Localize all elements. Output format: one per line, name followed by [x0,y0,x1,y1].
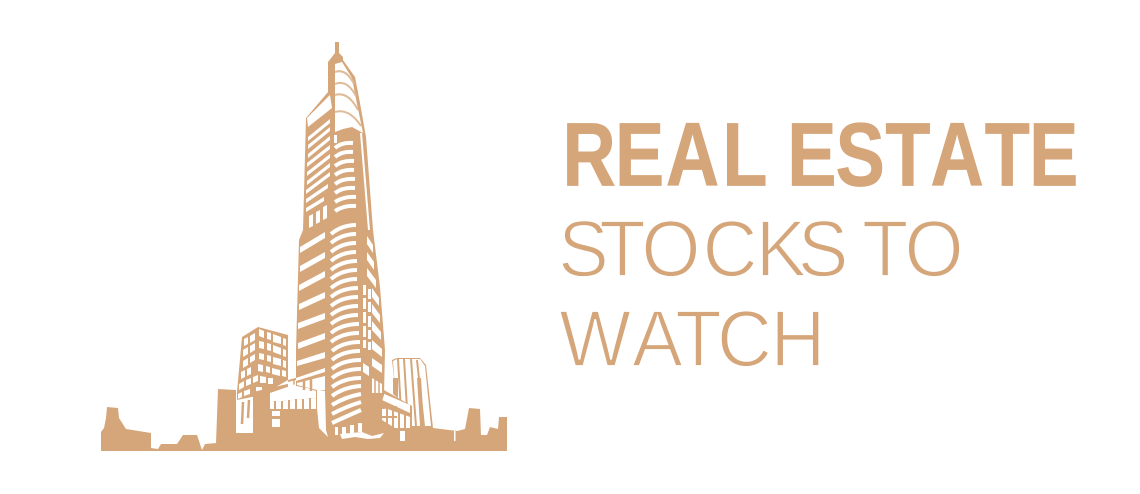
right round tower [392,358,433,428]
tower top white crown [335,62,363,133]
title: REAL ESTATE: REAL ESTATE [563,106,1078,205]
illustration: skyline and tower [101,42,507,451]
left office building [237,327,288,426]
subtitle line: STOCKS TO: STOCKS TO [558,203,964,293]
lower podium blocks [253,372,412,437]
skyline silhouette [101,389,507,451]
lower left facade stripes [296,232,325,381]
subtitle line: WATCH: WATCH [559,293,825,383]
right edge highlight [361,133,369,230]
upper left facade stripes [306,95,332,228]
window slit [334,135,337,143]
tower base cut-outs [335,423,456,441]
tower body [296,42,385,432]
main tower [296,42,385,432]
lower facade windows [297,376,325,390]
central curved balcony bands [331,143,361,423]
crown curves [335,71,361,126]
right facade windows [363,236,382,393]
